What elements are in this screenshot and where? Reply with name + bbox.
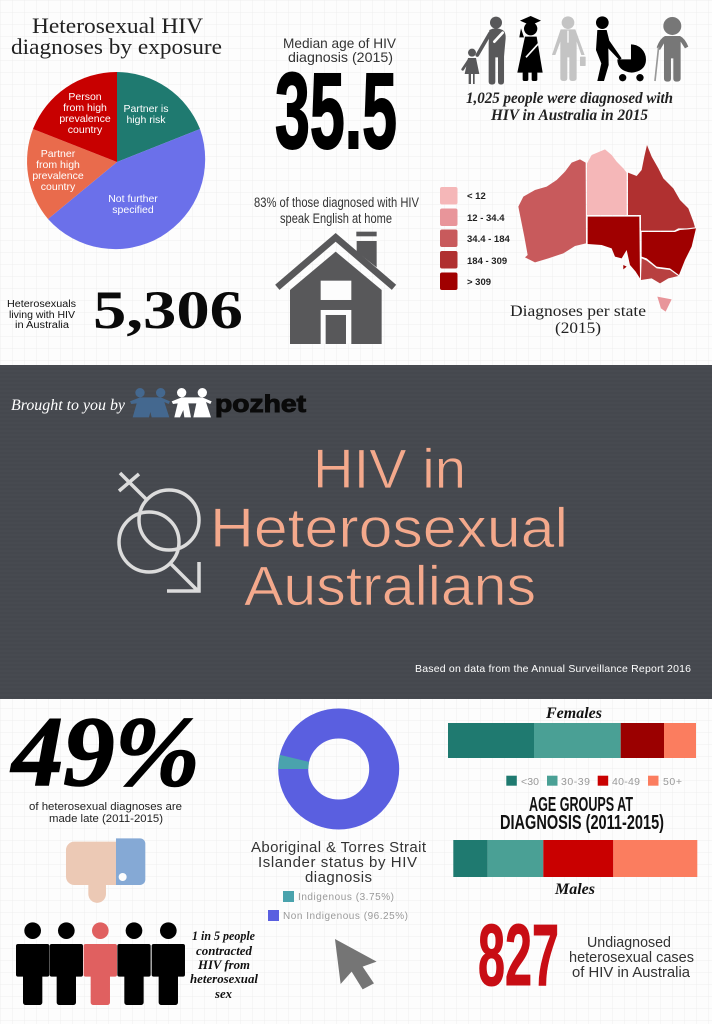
brought to you by: Brought to you by: [11, 397, 126, 414]
title: Heterosexual: [210, 496, 568, 559]
source note: Based on data from the Annual Surveillance Report 2016: [415, 663, 691, 675]
map caption: (2015): [555, 320, 601, 337]
status heading: [251, 839, 427, 886]
title: [210, 437, 568, 617]
pie chart: exposure: Partner is: [124, 103, 168, 115]
age legend: 40-49: [612, 776, 640, 788]
panel: diagnoses per state map: [440, 145, 696, 337]
caption: 1,025 people: 1,025 people were diagnosed with: [466, 90, 673, 107]
1 in 5 text: 1 in 5 people: [192, 928, 255, 943]
pie chart: exposure: [27, 72, 205, 249]
stat label: [7, 299, 76, 331]
panel: 1 in 5 people: [16, 922, 258, 1005]
panel: age groups at diagnosis: [448, 705, 697, 898]
label: females: Females: [545, 705, 602, 722]
caption: 1,025 people: [466, 90, 673, 124]
1 in 5 text: heterosexual: [190, 971, 258, 986]
status heading: diagnosis: [305, 869, 372, 886]
map legend: 184 - 309: [467, 256, 507, 267]
icon: person with pram: [596, 16, 646, 81]
donut legend: Non Indigenous (96.25%): [283, 911, 408, 922]
panel: people diagnosed: [463, 16, 688, 124]
median age label: diagnosis (2015): [288, 49, 393, 65]
stat number 827: 827: [478, 907, 559, 1004]
late diagnoses text: made late (2011-2015): [49, 813, 163, 825]
map legend: < 12: [467, 191, 486, 202]
stat label: in Australia: [15, 320, 69, 331]
undiagnosed text: [569, 935, 694, 981]
map caption: [510, 303, 646, 337]
English at home text: 83% of those diagnosed with HIV: [254, 195, 419, 210]
pie chart: exposure: Not further: [108, 193, 158, 205]
map legend: 34.4 - 184: [467, 234, 510, 245]
1 in 5 text: [190, 928, 258, 1001]
English at home text: [254, 195, 419, 226]
label: males: Males: [554, 881, 595, 898]
late diagnoses text: [29, 801, 182, 825]
icons: five people: [16, 922, 185, 1005]
age heading: AGE GROUPS AT: [529, 794, 633, 816]
pie chart: exposure: high risk: [126, 114, 166, 126]
status heading: Islander status by HIV: [258, 854, 417, 871]
title: HIV in: [313, 437, 466, 500]
icon: cursor arrow: [335, 939, 377, 989]
English at home text: speak English at home: [280, 211, 392, 226]
map caption: Diagnoses per state: [510, 303, 646, 320]
age legend: 30-39: [561, 776, 590, 788]
pie chart: exposure: specified: [112, 204, 154, 216]
1 in 5 text: contracted: [196, 943, 252, 958]
pie chart: exposure: from high: [36, 159, 80, 171]
status heading: Aboriginal & Torres Strait: [251, 839, 427, 856]
pie chart: exposure: country: [41, 181, 76, 193]
caption: 1,025 people: HIV in Australia in 2015: [490, 107, 648, 124]
late diagnoses text: of heterosexual diagnoses are: [29, 801, 182, 813]
donut chart: [278, 724, 384, 814]
stat: late diagnoses: [10, 696, 200, 903]
donut legend: Indigenous (3.75%): [298, 892, 394, 903]
pie chart: exposure: Person: [68, 91, 102, 103]
1 in 5 text: HIV from: [197, 957, 250, 972]
panel: Aboriginal and Torres Strait Islander status: [251, 724, 427, 922]
icon: parent with child: [463, 17, 506, 85]
stat: undiagnosed cases: [478, 907, 694, 1004]
donut legend: [268, 891, 408, 922]
median age label: [283, 35, 397, 65]
map legend: 12 - 34.4: [467, 213, 505, 224]
bar: males: [453, 840, 697, 877]
undiagnosed text: Undiagnosed: [587, 935, 671, 951]
heading: diagnoses by exposure: [11, 13, 222, 59]
age legend: <30: [521, 776, 539, 788]
icon: house: [277, 232, 394, 344]
panel: heterosexual HIV diagnoses by exposure: [11, 13, 222, 249]
icon: thumbs down: [66, 838, 145, 903]
pie chart: exposure: from high: [63, 102, 107, 114]
stat label: living with HIV: [9, 310, 75, 321]
logo: pozhet: pozhet: [215, 391, 306, 418]
pie chart: exposure: Partner: [41, 148, 76, 160]
map legend: [440, 187, 510, 290]
logo: pozhet: [130, 388, 306, 418]
icon: elderly person with cane: [655, 17, 688, 82]
pie chart: exposure: prevalence: [32, 170, 84, 182]
bar: females: [448, 723, 696, 758]
map: Australia by state: [518, 145, 696, 312]
stat label: Heterosexuals: [7, 299, 76, 310]
undiagnosed text: of HIV in Australia: [572, 965, 691, 981]
pie chart: exposure: country: [68, 124, 103, 136]
median age number: 35.5: [275, 50, 397, 171]
stat number 49%: 49%: [10, 696, 200, 807]
icon: graduate: [517, 16, 543, 81]
heading: diagnoses by exposure: Heterosexual HIV: [32, 13, 203, 38]
1 in 5 text: sex: [214, 986, 232, 1001]
pie chart: exposure: prevalence: [59, 113, 111, 125]
age heading: [500, 794, 664, 834]
heading: diagnoses by exposure: diagnoses by exposure: [11, 34, 222, 59]
panel: title banner: [0, 365, 712, 699]
icon: heterosexual symbol: [119, 473, 199, 591]
map legend: > 309: [467, 277, 491, 288]
icons: people row: [463, 16, 688, 85]
stat number 5,306: 5,306: [93, 280, 243, 340]
age legend: [506, 776, 682, 788]
stat: median age: [275, 35, 397, 171]
age legend: 50+: [663, 776, 682, 788]
icon: businessman: [552, 16, 586, 81]
title: Australians: [244, 554, 536, 617]
stat: heterosexuals living with HIV: [7, 280, 243, 340]
median age label: Median age of HIV: [283, 35, 397, 51]
undiagnosed text: heterosexual cases: [569, 950, 694, 966]
panel: English at home: [254, 195, 419, 344]
